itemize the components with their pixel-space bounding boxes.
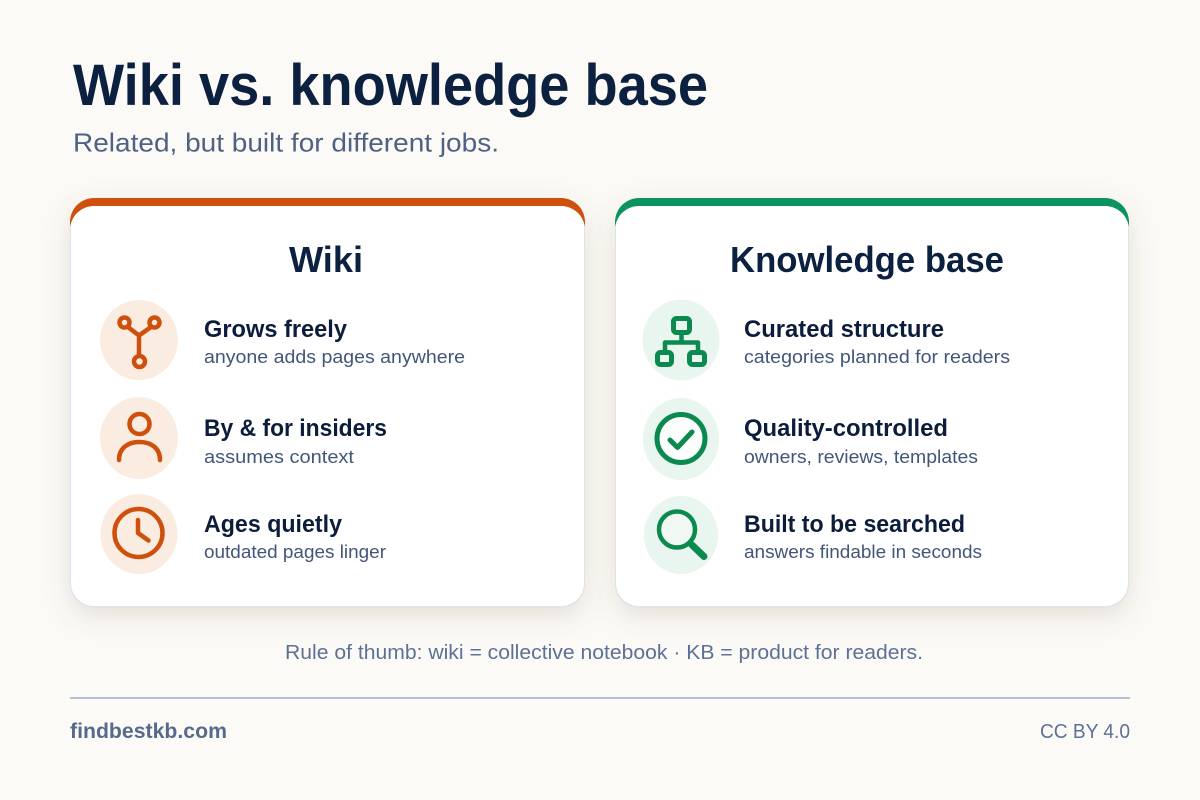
text: owners reviews templates: owners, reviews, templates — [744, 446, 978, 467]
text: ages quietly: Ages quietly — [204, 511, 342, 538]
text: assumes context: assumes context — [204, 446, 355, 467]
icon: org chart — [642, 300, 720, 380]
item: curated structure — [642, 300, 1010, 380]
item: ages quietly — [100, 494, 386, 574]
text: by and for insiders: By & for insiders — [204, 415, 387, 442]
text: categories planned: categories planned for readers — [744, 346, 1010, 367]
text: outdated pages: outdated pages linger — [204, 541, 386, 562]
icon: branching fork — [100, 300, 178, 380]
text: curated structure: Curated structure — [744, 316, 944, 343]
footer: source: findbestkb.com — [70, 719, 227, 743]
text: answers findable: answers findable in seconds — [744, 541, 982, 562]
subtitle: Related, but built for different jobs. — [73, 128, 499, 158]
text: built to be searched: Built to be searched — [744, 511, 965, 538]
item: quality-controlled — [643, 398, 978, 480]
item: by and for insiders — [100, 397, 387, 479]
text: anyone adds pages: anyone adds pages anywhere — [204, 346, 465, 367]
icon: magnifying glass — [644, 496, 718, 574]
panel: knowledge base — [615, 198, 1129, 607]
text: grows freely: Grows freely — [204, 316, 347, 343]
title: Wiki vs. knowledge base — [73, 53, 708, 118]
item: grows freely — [100, 300, 465, 380]
item: built to be searched — [644, 496, 982, 574]
knowledge base heading: Knowledge base — [730, 239, 1004, 280]
wiki heading: Wiki — [289, 239, 363, 280]
card background with orange top band — [70, 198, 585, 607]
text: quality-controlled: Quality-controlled — [744, 415, 948, 442]
footer: license: CC BY 4.0 — [1040, 721, 1130, 743]
card background with green top band — [615, 198, 1129, 607]
icon: clock — [100, 494, 178, 574]
icon: check circle — [643, 398, 719, 480]
icon: person — [100, 397, 178, 479]
rule of thumb caption: Rule of thumb: wiki = collective notebook · KB = product for readers. — [285, 641, 923, 664]
panel: wiki — [70, 198, 585, 607]
